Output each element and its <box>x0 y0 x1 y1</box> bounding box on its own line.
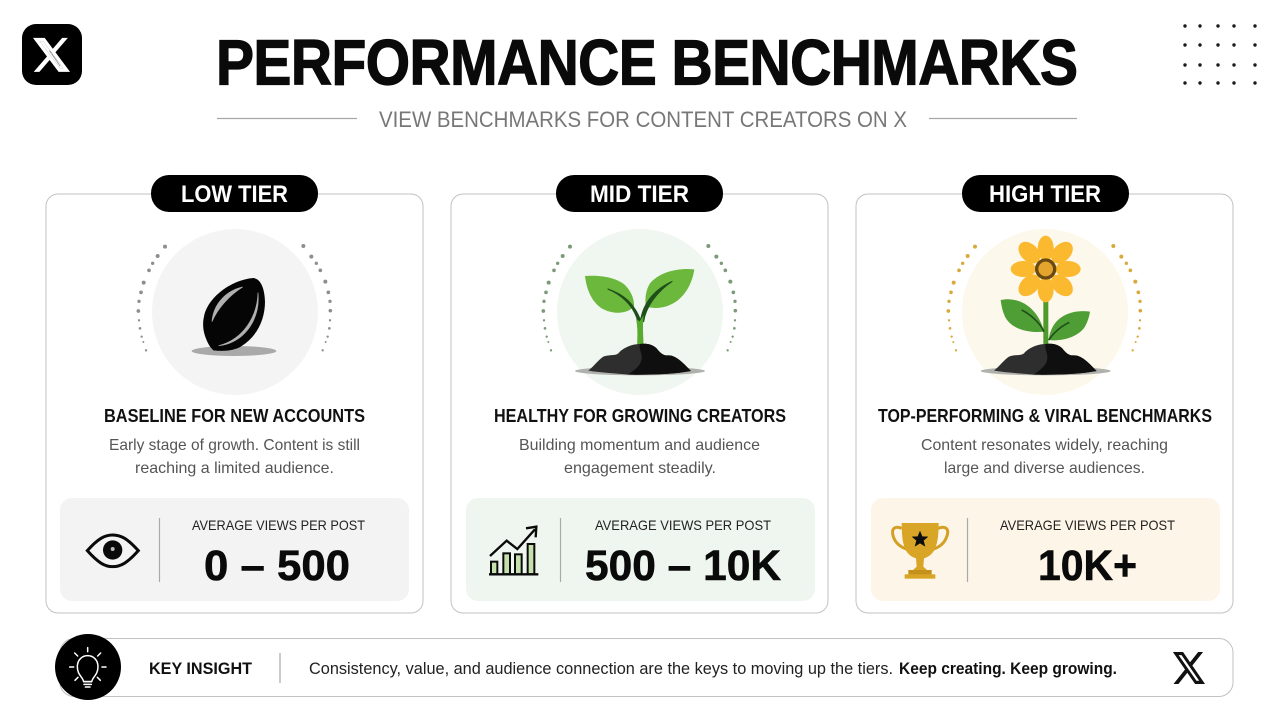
stat box: 0 – 500 <box>204 542 350 590</box>
badge: low tier: LOW TIER <box>181 181 288 208</box>
key insight bar: Consistency, value, and audience connection are the keys to moving up the tiers. <box>309 660 893 678</box>
description <box>921 437 1168 477</box>
stat box <box>466 498 815 601</box>
logo: X app icon <box>22 24 82 85</box>
title: PERFORMANCE BENCHMARKS <box>216 26 1078 98</box>
stat box: AVERAGE VIEWS PER POST <box>192 517 365 533</box>
icon: eye <box>87 535 138 567</box>
badge: mid tier: MID TIER <box>590 181 689 208</box>
key insight bar: KEY INSIGHT <box>149 659 253 678</box>
key insight bar: Keep creating. Keep growing. <box>899 660 1117 678</box>
icon: light bulb <box>55 634 121 700</box>
stat box: 10K+ <box>1038 542 1137 590</box>
icon: flower <box>946 229 1142 395</box>
badge: high tier <box>962 175 1129 212</box>
icon: seed <box>136 229 332 395</box>
decorative dot grid icon <box>1183 24 1257 85</box>
stat box <box>60 498 409 601</box>
key insight bar <box>55 634 1233 700</box>
stat box <box>871 498 1220 601</box>
description <box>519 437 760 477</box>
heading: HEALTHY FOR GROWING CREATORS <box>494 406 786 426</box>
badge: low tier <box>151 175 318 212</box>
badge: mid tier <box>556 175 723 212</box>
description: large and diverse audiences. <box>944 460 1145 477</box>
subtitle with rules: VIEW BENCHMARKS FOR CONTENT CREATORS ON X <box>379 107 907 132</box>
heading: BASELINE FOR NEW ACCOUNTS <box>104 406 365 426</box>
stat box: AVERAGE VIEWS PER POST <box>595 517 771 533</box>
stat box: AVERAGE VIEWS PER POST <box>1000 517 1175 533</box>
description <box>109 437 360 477</box>
icon: X logo <box>1173 652 1205 684</box>
icon: trophy <box>893 523 948 579</box>
panel: high tier <box>856 175 1233 613</box>
icon: sprout <box>541 229 737 395</box>
panel: mid tier <box>451 175 828 613</box>
description: Early stage of growth. Content is still <box>109 437 360 454</box>
description: reaching a limited audience. <box>135 460 334 477</box>
icon: growth chart <box>489 527 538 574</box>
description: Content resonates widely, reaching <box>921 437 1168 454</box>
heading: TOP-PERFORMING & VIRAL BENCHMARKS <box>878 406 1212 426</box>
panel: low tier <box>46 175 423 613</box>
stat box: 500 – 10K <box>585 542 781 590</box>
badge: high tier: HIGH TIER <box>989 181 1101 208</box>
description: Building momentum and audience <box>519 437 760 454</box>
description: engagement steadily. <box>564 460 716 477</box>
